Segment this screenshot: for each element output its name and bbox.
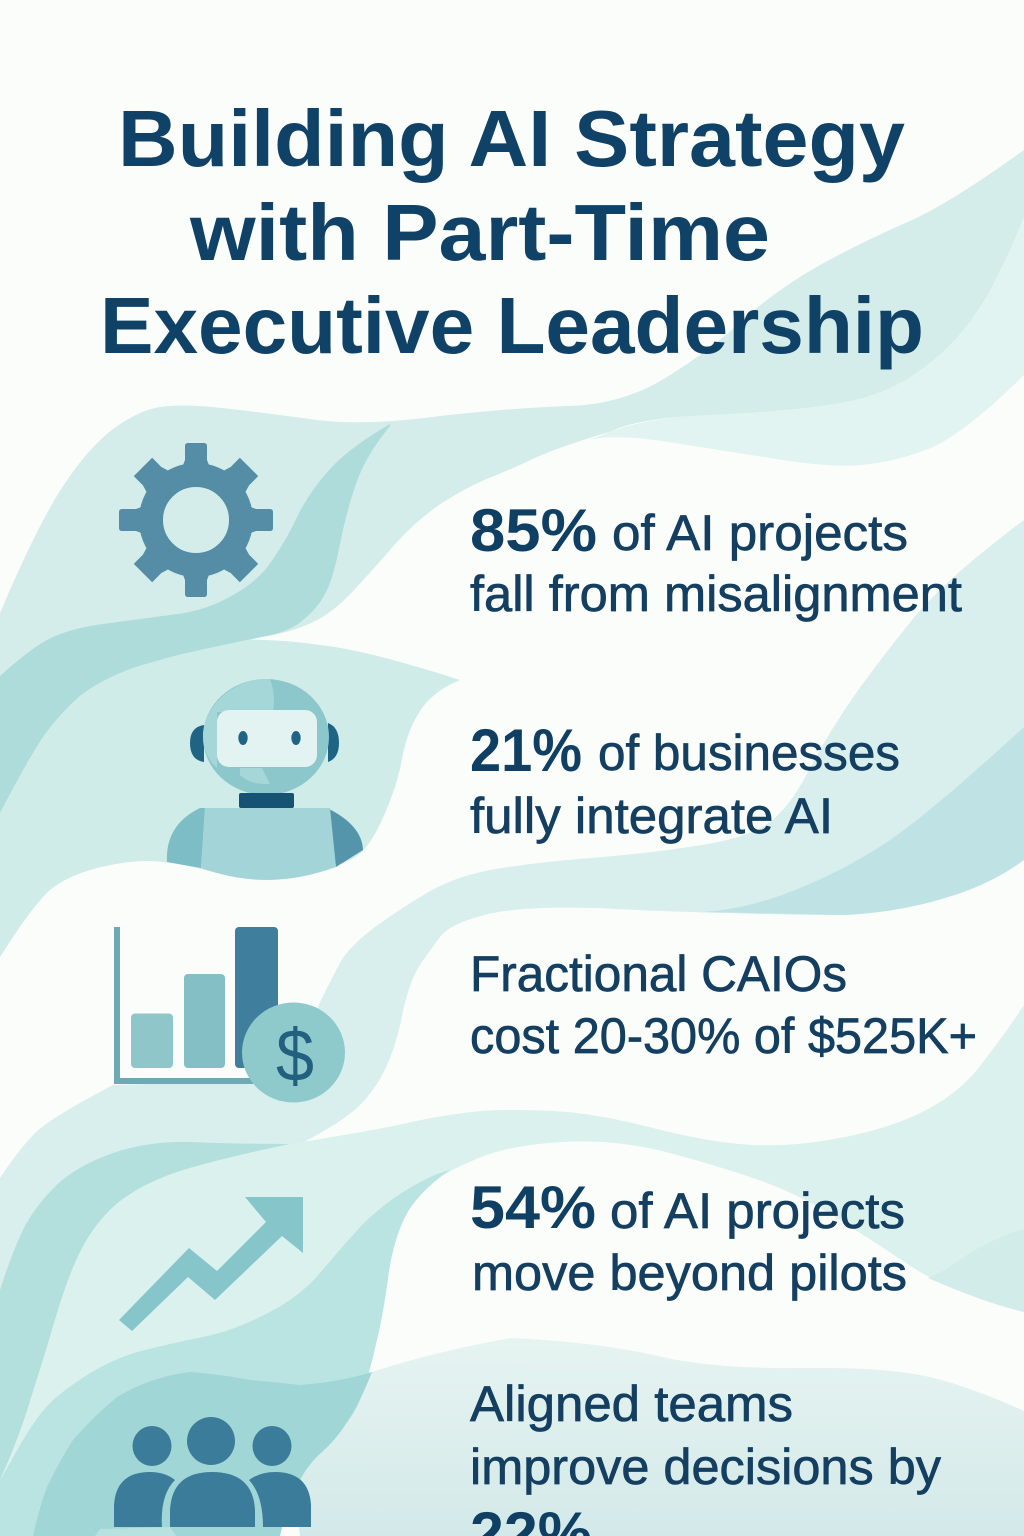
stat: Aligned teams improve decisions by 22%: Aligned teams	[470, 1376, 793, 1432]
title: with Part-Time	[189, 188, 770, 277]
icon: bar chart with dollar coin	[114, 927, 345, 1102]
title	[100, 94, 924, 370]
icon: growth arrow	[119, 1197, 303, 1331]
stat: 21% of businesses	[470, 717, 900, 844]
title: Executive Leadership	[100, 281, 924, 370]
stat: Aligned teams improve decisions by 22%	[470, 1376, 941, 1536]
stat: Fractional CAIOs cost: cost 20-30% of $525K+	[470, 1008, 977, 1064]
stat: 21% of businesses: 21%	[470, 717, 582, 784]
stat: 54% of AI projects: 54%	[470, 1174, 596, 1241]
stat: 21% of businesses: of businesses	[598, 725, 900, 781]
stat: 54% of AI projects: of AI projects	[610, 1183, 905, 1239]
icon: team of three people	[114, 1417, 311, 1527]
icon: bar chart with dollar coin: $	[276, 1014, 314, 1097]
title: Building AI Strategy	[118, 94, 906, 183]
stat: 21% of businesses: fully integrate AI	[470, 788, 833, 844]
icon: robot	[167, 679, 363, 880]
icon: gear	[119, 443, 273, 597]
stat: 85% of AI projects: fall from misalignment	[470, 566, 962, 622]
stat: Aligned teams improve decisions by 22%: improve decisions by	[470, 1439, 941, 1495]
stat: 85% of AI projects: of AI projects	[612, 505, 908, 561]
stat: Fractional CAIOs cost	[470, 946, 977, 1064]
stat: 54% of AI projects	[470, 1174, 907, 1301]
stat: 85% of AI projects: 85%	[470, 497, 597, 564]
stat: 54% of AI projects: move beyond pilots	[472, 1245, 907, 1301]
stat: 85% of AI projects	[470, 497, 962, 622]
stat: Fractional CAIOs cost: Fractional CAIOs	[470, 946, 847, 1002]
